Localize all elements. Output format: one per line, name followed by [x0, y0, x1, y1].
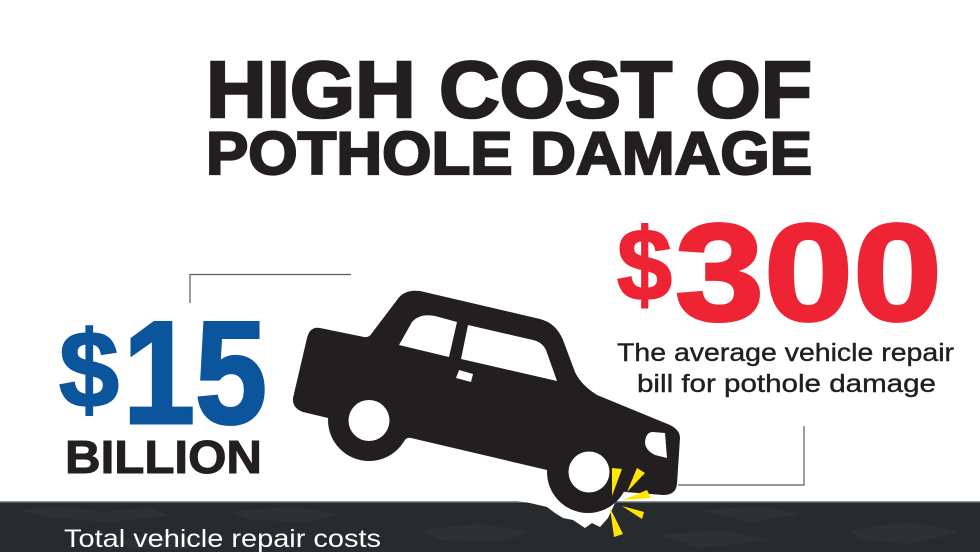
connector line: left [190, 274, 351, 303]
title [206, 45, 812, 187]
title: HIGH COST OF [206, 45, 812, 134]
text: $300 description: The average vehicle repair [617, 339, 954, 367]
title: POTHOLE DAMAGE [206, 120, 812, 187]
rear tyre [328, 379, 410, 461]
rear wheel hub [348, 400, 390, 441]
icon: car tipping into pothole [293, 291, 680, 513]
stat: $15 [59, 291, 267, 454]
stat: $15: 15 [123, 291, 267, 454]
icon: impact sparks [610, 468, 651, 537]
front wheel hub [568, 452, 610, 492]
stat: $15: $ [59, 309, 119, 431]
road surface [0, 500, 980, 552]
stat: $300: $ [617, 208, 672, 322]
front tyre [547, 431, 629, 513]
stat: $300: 300 [675, 196, 942, 350]
text: $300 description [617, 339, 954, 398]
connector line: right [678, 426, 804, 485]
text: billion: BILLION [65, 431, 262, 483]
text: $300 description: bill for pothole damage [637, 370, 936, 398]
